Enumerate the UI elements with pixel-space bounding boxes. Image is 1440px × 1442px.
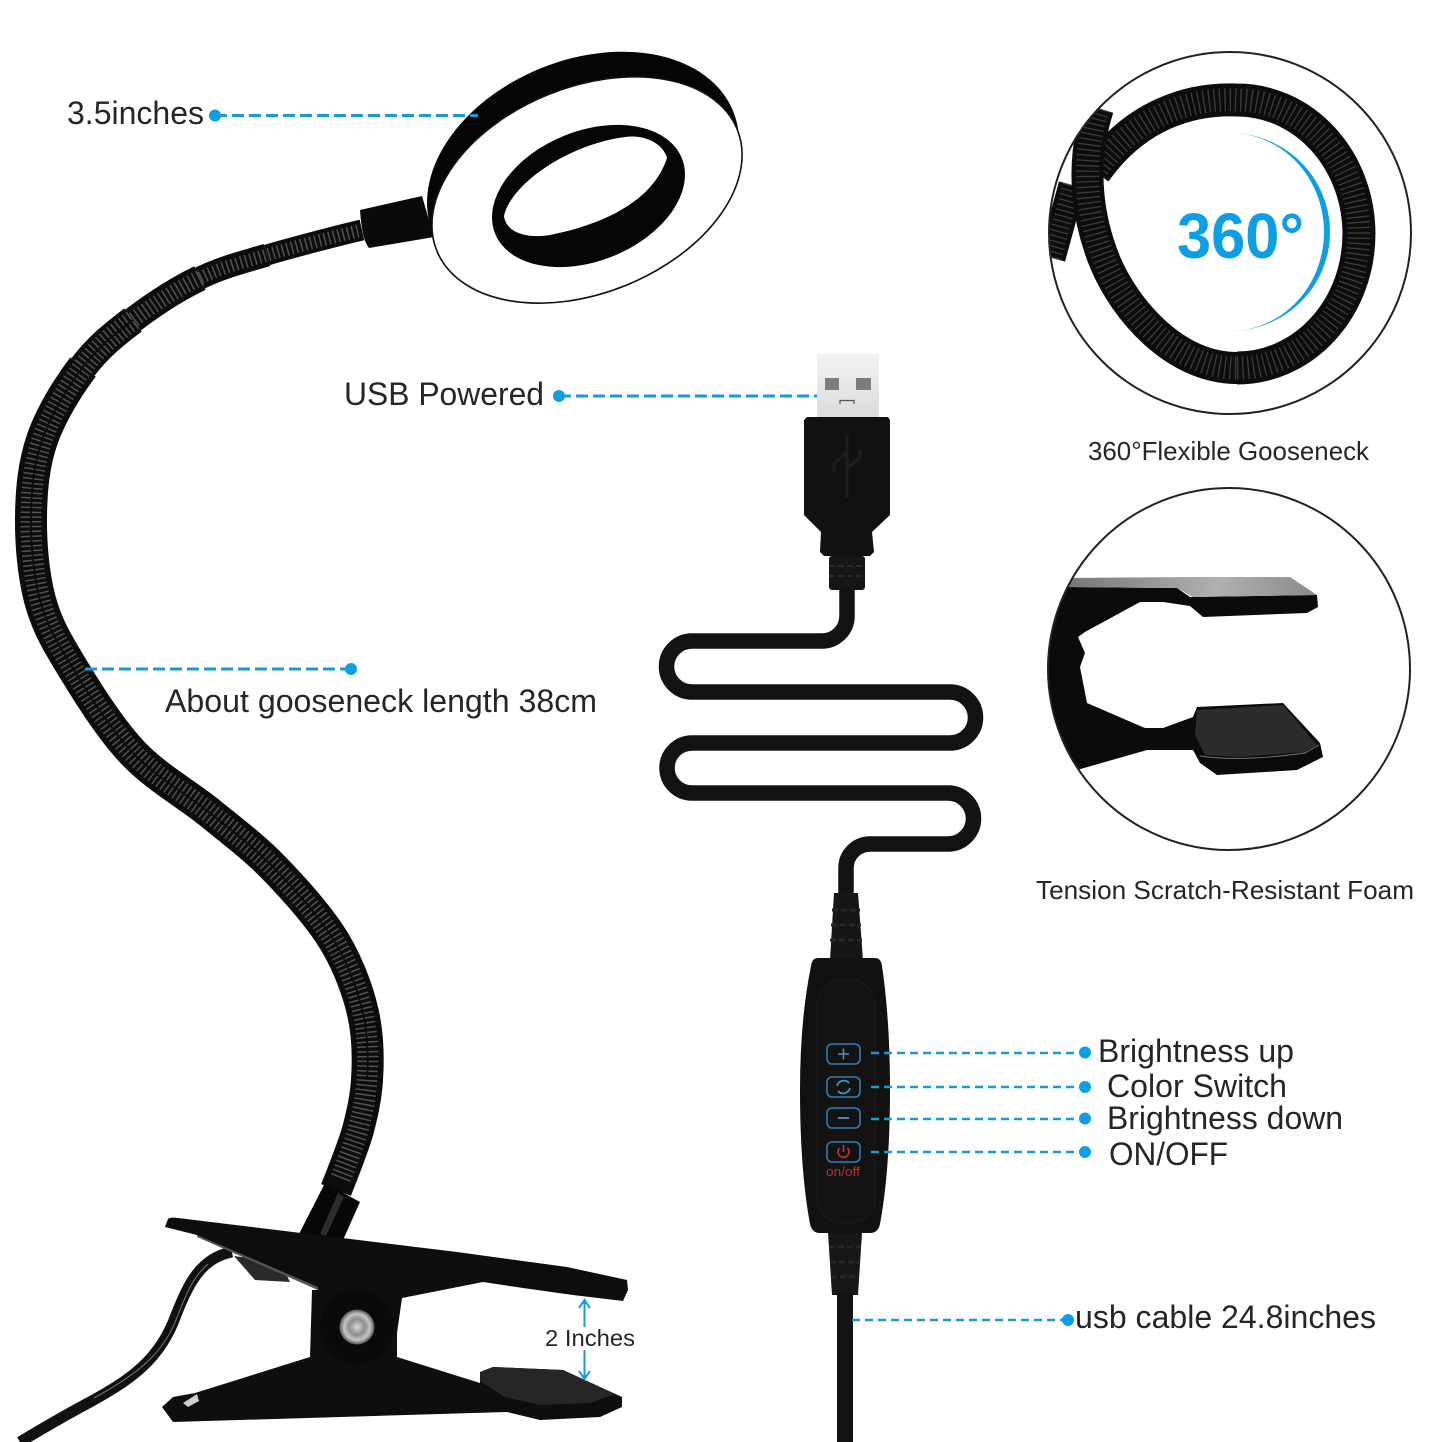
button: power	[827, 1142, 860, 1162]
clip spring	[234, 1256, 290, 1282]
panel: foam pad detail	[1040, 488, 1410, 850]
control panel inset	[817, 980, 875, 1223]
callout: on off: ON/OFF	[1109, 1136, 1228, 1172]
button: plus	[827, 1044, 860, 1064]
button: color switch	[827, 1077, 860, 1097]
desk clip	[20, 1183, 628, 1442]
lamp inner ring	[471, 98, 706, 294]
panel: 360 flexible gooseneck detail	[1049, 52, 1411, 414]
callout: usb cable length: usb cable 24.8inches	[1075, 1299, 1376, 1335]
usb plug body	[804, 417, 890, 556]
measurement: clip opening	[545, 1300, 635, 1379]
callout: USB powered: USB Powered	[344, 376, 544, 412]
clip highlight	[183, 1394, 199, 1407]
caption: flexible gooseneck: 360°Flexible Gooseneck	[1088, 436, 1370, 466]
callout: USB powered	[344, 376, 817, 412]
usb metal shell	[817, 354, 879, 417]
power cord	[20, 1252, 232, 1442]
callout: brightness down: Brightness down	[1107, 1100, 1343, 1136]
lower cable	[837, 1293, 853, 1442]
callout: brightness down	[871, 1100, 1343, 1136]
lamp collar	[360, 196, 434, 248]
callout: brightness up: Brightness up	[1098, 1033, 1294, 1069]
circle outline	[1048, 488, 1410, 850]
inline control box	[800, 893, 890, 1295]
callout: gooseneck length: About gooseneck length 38cm	[165, 683, 597, 719]
usb strain relief	[829, 556, 865, 590]
caption: foam pad: Tension Scratch-Resistant Foam	[1036, 875, 1414, 905]
clip lower pad	[480, 1367, 615, 1405]
lamp light face	[398, 34, 776, 346]
lamp center opening	[504, 137, 667, 236]
upper strain relief	[830, 893, 863, 960]
pivot screw	[320, 1290, 394, 1364]
callout: lamp diameter: 3.5inches	[67, 95, 204, 131]
upper pad top	[1068, 577, 1317, 597]
callout: on off	[871, 1136, 1228, 1172]
USB plug	[804, 354, 890, 590]
lower foam pad	[1195, 705, 1317, 757]
ring lamp head	[360, 7, 776, 346]
USB cable serpentine	[667, 588, 976, 900]
circle outline	[1049, 52, 1411, 414]
rotation arc	[1230, 133, 1330, 331]
gooseneck arm	[31, 230, 368, 1190]
clip body	[162, 1218, 628, 1422]
measurement: clip opening: 2 Inches	[545, 1325, 635, 1351]
neck collar	[298, 1183, 360, 1240]
button: minus	[827, 1108, 860, 1128]
lamp back rim	[391, 7, 775, 337]
callout: usb cable length	[852, 1299, 1376, 1335]
callout: gooseneck length	[85, 663, 597, 719]
gooseneck coil	[1052, 100, 1359, 368]
on/off label: on/off	[826, 1165, 861, 1179]
control box shell	[800, 958, 890, 1233]
clip jaws	[1040, 577, 1323, 775]
lower strain relief	[828, 1233, 862, 1295]
callout: color switch: Color Switch	[1107, 1068, 1287, 1104]
callout: lamp diameter	[67, 95, 478, 131]
callout: brightness up	[871, 1033, 1294, 1069]
callout: color switch	[871, 1068, 1287, 1104]
360 degree label: 360°	[1177, 200, 1304, 272]
